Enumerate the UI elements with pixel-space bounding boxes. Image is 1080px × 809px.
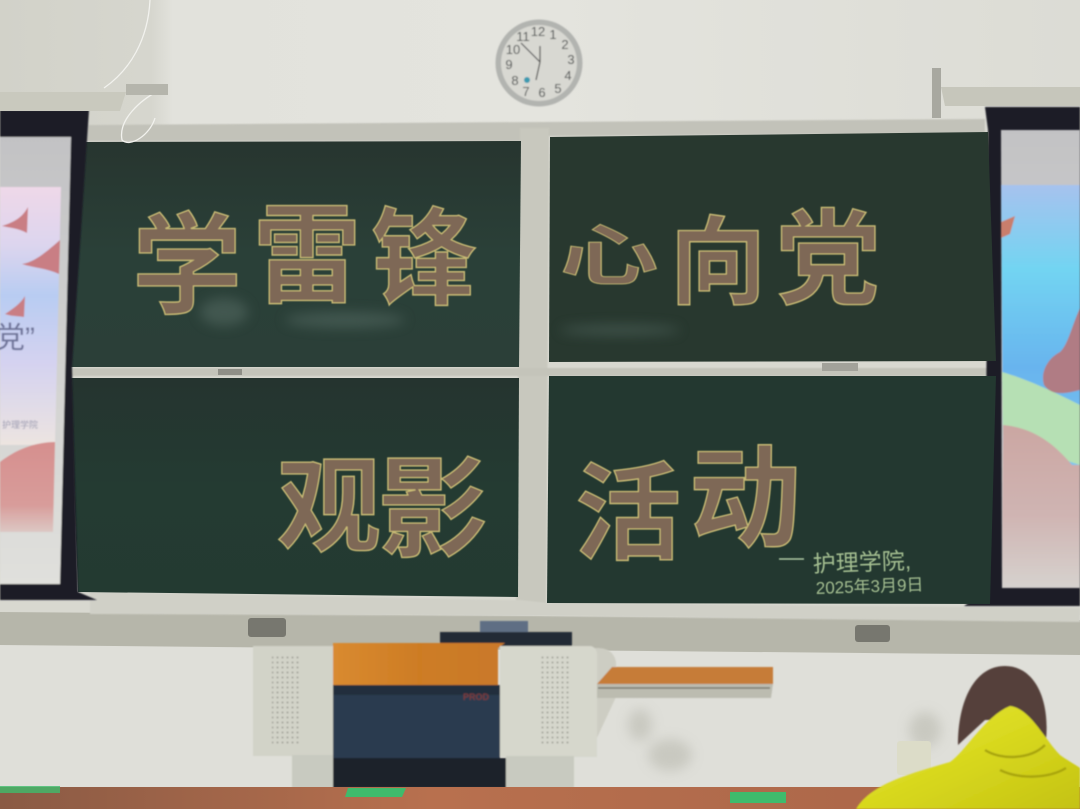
chalk heading: 心向党: 党 [776, 203, 880, 319]
chalk heading: 学雷锋: 锋 [371, 201, 477, 319]
shadow band under board [0, 612, 1080, 655]
wall scuff marks [628, 709, 941, 771]
clock numerals: 1 [549, 27, 557, 42]
bird [1001, 216, 1015, 238]
chalk heading: 学雷锋: 学 [132, 206, 242, 329]
rail brackets [218, 68, 941, 642]
upper wall [0, 0, 1080, 130]
board panel bottom left [70, 378, 519, 597]
clock numerals [505, 24, 575, 100]
speaker holes right [541, 656, 571, 744]
podium base [292, 755, 333, 788]
chalk smears [200, 298, 680, 335]
chalk heading: 活动 [575, 437, 801, 574]
clock numerals: 11 [516, 29, 530, 44]
seated person [856, 666, 1080, 809]
chalk signature: 护理学院, [812, 548, 912, 577]
clock numerals: 9 [505, 57, 513, 72]
white cup [897, 741, 931, 775]
birds [2, 207, 60, 317]
pull-out shelf [597, 667, 773, 684]
red hill [0, 442, 55, 532]
speaker holes left [272, 656, 300, 744]
podium wood top [333, 643, 505, 685]
chalk heading: 活动: 动 [689, 437, 801, 562]
clock numerals: 12 [531, 24, 545, 39]
chalk signature: 2025年3月9日 [815, 575, 924, 598]
wall cables [104, 0, 160, 142]
podium back monitor [440, 621, 572, 646]
board panel top right [549, 132, 996, 362]
clock numerals: 6 [538, 85, 546, 100]
chalk heading: 活动: 活 [575, 456, 681, 574]
jacket shadow [985, 745, 1066, 777]
clock numerals: 8 [511, 73, 519, 88]
right screen case behind board [964, 107, 1080, 606]
chalk signature [779, 548, 924, 598]
chalk heading: 观影: 影 [378, 449, 488, 572]
clock numerals: 2 [561, 37, 569, 52]
right screen housing [941, 87, 1080, 106]
maroon figure [1043, 308, 1080, 393]
podium navy front [333, 685, 500, 758]
lower wall [0, 615, 1080, 809]
clock numerals: 3 [567, 52, 575, 67]
podium right panel [500, 646, 597, 757]
left slide image [0, 187, 61, 445]
podium left panel [253, 646, 333, 756]
right projector screen [1001, 130, 1080, 588]
red logo: PROD [463, 692, 490, 702]
board panel top left [70, 141, 521, 367]
clock numerals: 4 [564, 68, 572, 83]
clock numerals: 5 [554, 81, 562, 96]
podium [253, 621, 773, 788]
hair [958, 666, 1047, 745]
chalk heading: 学雷锋: 雷 [253, 196, 361, 317]
board panel bottom right [547, 376, 996, 604]
chalk heading: 心向党 [560, 203, 880, 319]
green desk stickers [0, 786, 786, 803]
left screen housing [0, 92, 126, 111]
yellow jacket [856, 706, 1080, 809]
slide small text: 护理学院 [2, 419, 38, 430]
shelf rail [597, 684, 773, 698]
wall clock [496, 20, 582, 106]
podium side panel right [574, 648, 616, 757]
foreground desk [0, 787, 1080, 809]
clock hands [521, 43, 540, 80]
chalk heading: 观影 [277, 449, 488, 572]
chalk heading: 心向党: 心 [560, 219, 658, 293]
chalk heading: 学雷锋 [132, 196, 477, 329]
right slide image [1001, 185, 1080, 465]
pink hill [1002, 425, 1080, 588]
clock numerals: 10 [506, 42, 520, 57]
cable bracket [126, 84, 168, 95]
left projector screen [0, 110, 97, 600]
blackboard frame [66, 119, 1080, 622]
green band [1002, 372, 1080, 465]
chalk heading: 观影: 观 [277, 450, 381, 566]
chalk heading: 心向党: 向 [670, 210, 766, 317]
clock numerals: 7 [522, 84, 530, 99]
